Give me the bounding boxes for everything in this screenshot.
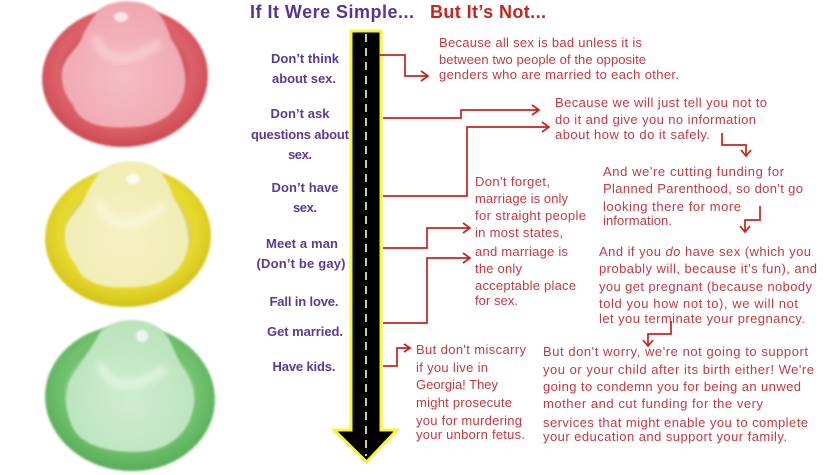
arrow: don't have sex to no information: [383, 122, 549, 196]
text: planned parenthood: looking there for more: [603, 199, 741, 214]
arrow: to tell you not to: [383, 105, 539, 118]
text: pregnancy: And if you do have sex (which you: [599, 244, 811, 259]
text: no information: [555, 95, 767, 142]
step: fall in love: Fall in love.: [270, 294, 338, 309]
text: marriage: for sex.: [475, 293, 518, 308]
icon: red condom: [37, 1, 213, 153]
text: no information: about how to do it safely.: [555, 127, 710, 142]
arrow: have kids to miscarry: [383, 344, 410, 366]
arrow: to all sex is bad: [379, 55, 428, 81]
step: don't have sex: Don’t have: [272, 180, 338, 195]
text: Georgia: [416, 342, 526, 442]
left column: simple steps: [251, 51, 350, 374]
heading: If It Were Simple: If It Were Simple...: [250, 2, 414, 22]
step: don't ask questions: sex.: [288, 147, 312, 162]
text: Georgia: Georgia! They: [416, 377, 498, 392]
text: don't worry: mother and cut funding for the very: [543, 396, 764, 411]
text: no information: Because we will just tell you not to: [555, 95, 767, 110]
text: don't worry: going to condemn you for being an unwed: [543, 379, 801, 394]
text: don't worry: services that might enable you to complete: [543, 415, 808, 430]
text: Georgia: you for murdering: [416, 413, 522, 428]
text: all sex is bad: [439, 35, 679, 82]
text: all sex is bad: genders who are married to each other.: [439, 67, 679, 82]
text: all sex is bad: Because all sex is bad unless it is: [439, 35, 642, 50]
arrow: meet a man to marriage: [383, 223, 470, 248]
icon: green condom: [40, 319, 220, 475]
connector arrows: [379, 55, 760, 366]
arrow: safely to planned parenthood: [722, 133, 751, 156]
heading: But It's Not: But It’s Not...: [430, 2, 546, 22]
text: marriage: Don't forget,: [475, 174, 550, 189]
text: marriage: the only: [475, 261, 522, 276]
text: pregnancy: told you how not to), we will not: [599, 296, 798, 311]
step: don't think about sex: about sex.: [272, 71, 336, 86]
arrow: pregnancy to don't worry: [643, 321, 671, 346]
text: don't worry: But don't worry, we're not going to support: [543, 344, 808, 359]
text: Georgia: if you live in: [416, 360, 488, 375]
step: meet a man: [256, 236, 346, 271]
text: Georgia: But don't miscarry: [416, 342, 526, 357]
text: pregnancy: [599, 244, 817, 326]
step: meet a man: (Don’t be gay): [256, 256, 346, 271]
text: all sex is bad: between two people of the opposite: [439, 52, 646, 67]
text: no information: do it and give you no information: [555, 112, 756, 127]
step: don't ask questions: Don’t ask: [270, 106, 330, 121]
text: marriage: in most states,: [475, 225, 563, 240]
step: don't ask questions: questions about: [251, 127, 350, 142]
step: get married: Get married.: [267, 324, 343, 339]
text: planned parenthood: Planned Parenthood, so don't go: [603, 181, 803, 196]
text: pregnancy: probably will, because it's fun), and: [599, 261, 817, 276]
icon: yellow condom: [40, 161, 216, 313]
step: don't ask questions: [251, 106, 350, 162]
step: don't have sex: sex.: [293, 200, 317, 215]
text: marriage: [475, 174, 586, 308]
text: Georgia: might prosecute: [416, 395, 512, 410]
text: Georgia: your unborn fetus.: [416, 427, 525, 442]
text: marriage: marriage is only: [475, 191, 568, 206]
arrow: get married to marriage: [383, 253, 470, 323]
step: have kids: Have kids.: [272, 359, 336, 374]
text: pregnancy: let you terminate your pregnancy.: [599, 311, 805, 326]
text: don't worry: your education and support your family.: [543, 429, 787, 444]
arrow: planned parenthood to pregnancy: [740, 206, 760, 232]
step: don't think about sex: Don’t think: [271, 51, 340, 66]
step: don't think about sex: [271, 51, 340, 86]
step: meet a man: Meet a man: [266, 236, 338, 251]
text: planned parenthood: information.: [603, 213, 672, 228]
text: planned parenthood: And we're cutting funding for: [603, 164, 785, 179]
road arrow: [334, 31, 397, 462]
text: don't worry: [543, 344, 814, 444]
text: marriage: acceptable place: [475, 278, 576, 293]
text: planned parenthood: [603, 164, 803, 228]
text: marriage: and marriage is: [475, 244, 568, 259]
text: pregnancy: you get pregnant (because nobody: [599, 279, 812, 294]
text: don't worry: you or your child after its birth either! We're: [543, 362, 814, 377]
step: don't have sex: [272, 180, 338, 215]
text: marriage: for straight people: [475, 208, 586, 223]
